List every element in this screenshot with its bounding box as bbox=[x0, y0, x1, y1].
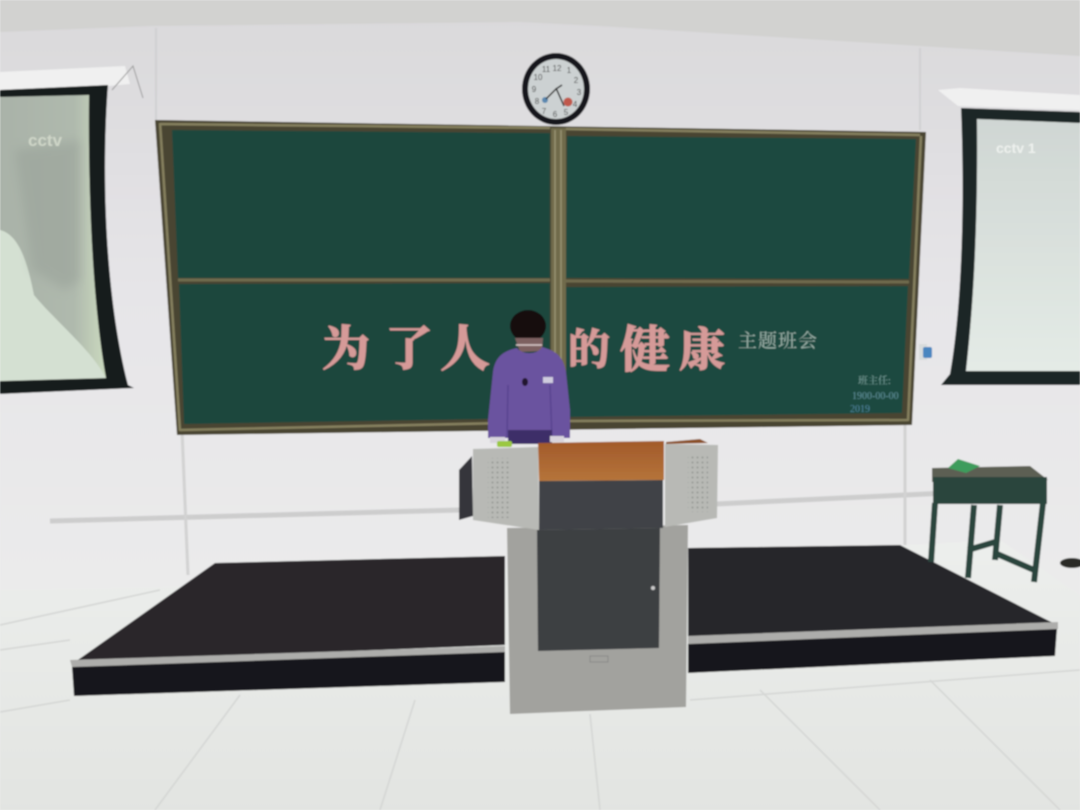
blackboard heading: 健 bbox=[620, 322, 670, 378]
clock numerals: 11 bbox=[542, 65, 551, 74]
wall conduit pipe bbox=[50, 425, 1010, 575]
clock numerals: 6 bbox=[553, 110, 558, 119]
clock numerals: 2 bbox=[574, 76, 579, 85]
lectern base bbox=[507, 525, 688, 714]
clock numerals: 12 bbox=[553, 64, 562, 73]
clock numerals bbox=[532, 64, 582, 119]
blackboard heading bbox=[322, 321, 725, 378]
blackboard heading: 的 bbox=[568, 327, 610, 374]
dark object on floor bbox=[1060, 558, 1080, 568]
clock numerals: 5 bbox=[564, 108, 569, 117]
lectern bbox=[459, 439, 718, 714]
sweatshirt emblem bbox=[543, 377, 553, 383]
clock numerals: 1 bbox=[567, 66, 572, 75]
side table bbox=[931, 459, 1048, 582]
clock numerals: 4 bbox=[573, 100, 578, 109]
presenter bbox=[488, 310, 570, 447]
blackboard bbox=[155, 120, 926, 435]
glasses bbox=[516, 344, 542, 346]
clock numerals: 9 bbox=[532, 85, 537, 94]
blackboard heading: 人 bbox=[440, 321, 490, 377]
side drawer bbox=[459, 456, 473, 520]
right projector screen bbox=[938, 88, 1080, 385]
screen logo: cctv 1 bbox=[996, 140, 1036, 156]
hands and green object bbox=[490, 437, 505, 443]
blackboard small note: 班主任: bbox=[858, 374, 891, 387]
blackboard small note: 1900-00-00 bbox=[852, 391, 899, 402]
clock numerals: 3 bbox=[577, 88, 582, 97]
hair and face bbox=[510, 310, 546, 342]
cabinet door bbox=[537, 528, 660, 651]
board panel: top left bbox=[172, 130, 550, 278]
green cloth on table bbox=[948, 459, 980, 473]
clock numerals: 7 bbox=[542, 107, 547, 116]
classroom floor bbox=[0, 540, 1080, 810]
blackboard small note bbox=[850, 374, 899, 415]
dark console bbox=[539, 480, 663, 530]
blackboard small note: 2019 bbox=[850, 404, 870, 415]
clock numerals: 10 bbox=[534, 73, 543, 82]
blackboard heading: 为 bbox=[322, 323, 370, 376]
left projector screen bbox=[0, 66, 143, 394]
speaker wing right bbox=[665, 444, 718, 527]
blackboard subheading: 主题班会 bbox=[738, 330, 818, 352]
classroom wall bbox=[0, 0, 1080, 600]
board panel: bottom left bbox=[179, 283, 550, 424]
wooden top bbox=[538, 441, 664, 481]
purple sweatshirt bbox=[488, 347, 570, 438]
speaker wing left bbox=[473, 447, 539, 530]
wall clock bbox=[522, 53, 590, 125]
board panel: top right bbox=[566, 136, 916, 279]
ceiling bbox=[0, 0, 1080, 56]
stage platform bbox=[70, 545, 1058, 696]
board panel: bottom right bbox=[566, 286, 908, 417]
clock numerals: 8 bbox=[535, 97, 540, 106]
blackboard heading: 康 bbox=[679, 325, 725, 376]
board centre post bbox=[551, 128, 566, 420]
blackboard heading: 了 bbox=[385, 323, 433, 376]
screen logo: cctv bbox=[28, 131, 63, 150]
wall switch bbox=[919, 344, 932, 360]
